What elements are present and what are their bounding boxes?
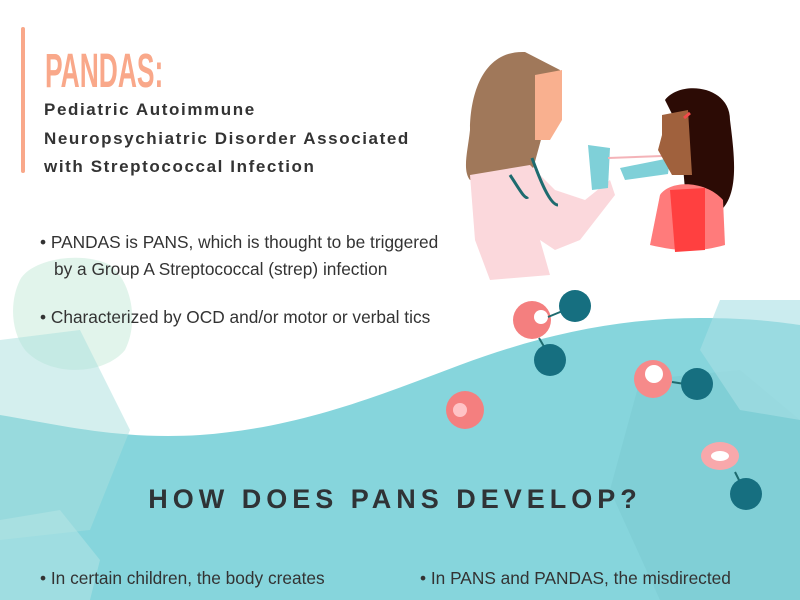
hair clip: [684, 113, 690, 118]
subtitle: with Streptococcal Infection: [44, 157, 316, 176]
bottom text right: • In PANS and PANDAS, the misdirected: [420, 568, 731, 588]
accent bar: [21, 27, 25, 173]
child hair: [665, 88, 734, 215]
doctor face: [535, 70, 562, 140]
stethoscope: [510, 158, 558, 205]
subtitle: Pediatric Autoimmune: [44, 100, 256, 119]
child shirt: [650, 184, 725, 250]
bullet list: by a Group A Streptococcal (strep) infection: [54, 259, 387, 279]
doctor hair: [466, 52, 560, 180]
child face: [658, 110, 692, 175]
section heading: HOW DOES PANS DEVELOP?: [148, 484, 642, 514]
illustration: doctor and child: [466, 52, 734, 280]
bullet list: • PANDAS is PANS, which is thought to be triggered: [40, 232, 438, 252]
subtitle: [44, 100, 410, 176]
bullet list: • Characterized by OCD and/or motor or verbal tics: [40, 307, 430, 327]
bottom text left: • In certain children, the body creates: [40, 568, 325, 588]
coat: [470, 165, 615, 280]
glove: [588, 145, 610, 190]
bullet list: [40, 232, 438, 327]
title: PANDAS:: [45, 45, 163, 98]
subtitle: Neuropsychiatric Disorder Associated: [44, 128, 410, 148]
